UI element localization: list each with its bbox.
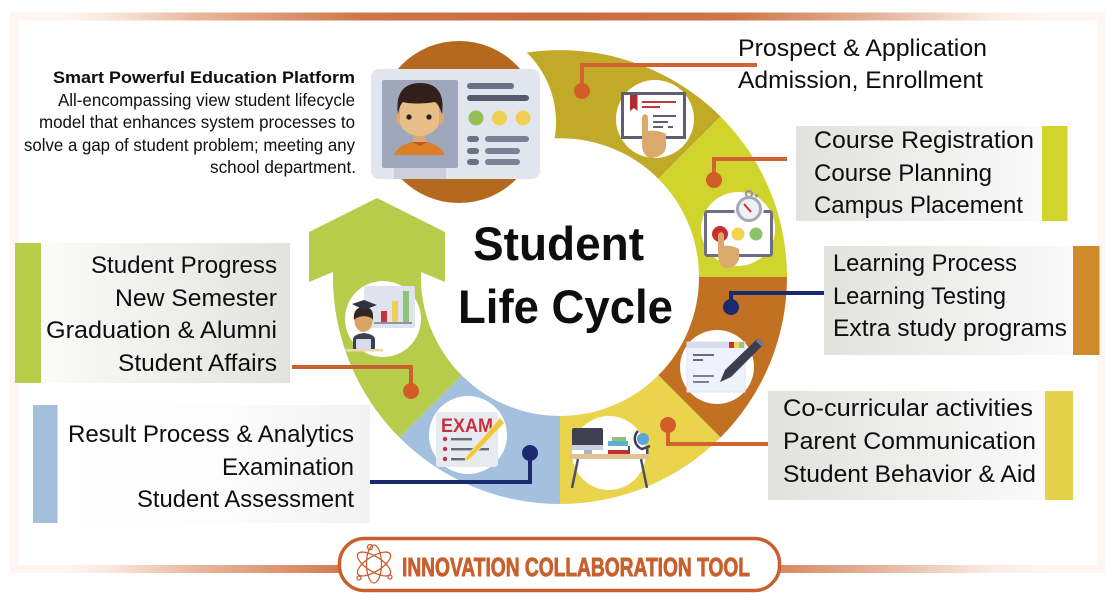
panel: course — [796, 126, 1068, 221]
panel: learning — [824, 246, 1100, 355]
segment: result — [400, 375, 560, 504]
panel: result process: Student Assessment — [137, 486, 354, 513]
life cycle ring — [309, 50, 787, 504]
panel: result process: Result Process & Analytics — [68, 421, 354, 448]
panel: course: Campus Placement — [814, 192, 1023, 219]
panel: co-curricular: Parent Communication — [783, 428, 1036, 455]
connector: co-curricular — [660, 417, 768, 444]
intro text block: solve a gap of student problem; meeting any — [24, 135, 355, 155]
icon: exam sheet — [429, 396, 507, 474]
intro text block: All-encompassing view student lifecycle — [58, 90, 355, 110]
panel: co-curricular — [768, 391, 1073, 500]
panel: result process — [33, 405, 370, 523]
panel: learning: Learning Process — [833, 250, 1017, 277]
title: Life Cycle — [458, 280, 673, 333]
title: Student — [473, 217, 644, 270]
text: prospect and admission — [738, 35, 987, 94]
segment: co-curricular — [560, 375, 720, 504]
connector: learning — [723, 293, 824, 315]
banner: innovation collaboration tool — [340, 538, 780, 590]
panel: learning: Extra study programs — [833, 315, 1067, 342]
segment: arrow progress — [309, 198, 462, 438]
connector: course — [706, 159, 787, 188]
segment: prospect — [501, 50, 720, 179]
connector: progress — [292, 367, 419, 399]
intro text block: Smart Powerful Education Platform — [53, 69, 355, 87]
icon: prospect tablet — [616, 80, 694, 158]
panel: co-curricular: Co-curricular activities — [783, 395, 1033, 422]
panel: course: Course Registration — [814, 127, 1034, 154]
title — [458, 217, 673, 333]
icon: atom — [354, 544, 394, 583]
panel: student progress — [15, 243, 290, 383]
student ID card icon — [362, 25, 556, 219]
icon: course tablet and stopwatch — [701, 191, 775, 268]
connector: result — [370, 445, 538, 482]
intro text block: school department. — [210, 157, 356, 177]
panel: student progress: New Semester — [115, 285, 277, 312]
text: prospect and admission: Prospect & Application — [738, 35, 987, 62]
panel: co-curricular: Student Behavior & Aid — [783, 461, 1036, 488]
intro text block — [24, 69, 356, 177]
icon: graduate with bar chart — [345, 281, 421, 357]
connector: prospect — [574, 65, 757, 99]
text: prospect and admission: Admission, Enrollment — [738, 67, 983, 94]
panel: student progress: Student Affairs — [118, 350, 277, 377]
segment: learning — [658, 277, 787, 438]
segment: course — [658, 116, 787, 277]
panel: student progress: Student Progress — [91, 252, 277, 279]
panel: course: Course Planning — [814, 160, 992, 187]
icon: learning window and pen — [680, 330, 764, 404]
icon: desk with computer and globe — [569, 416, 650, 490]
panel: result process: Examination — [222, 454, 354, 481]
icon: exam sheet: EXAM — [441, 416, 493, 437]
intro text block: model that enhances system processes to — [39, 112, 355, 132]
banner: innovation collaboration tool: INNOVATION COLLABORATION TOOL — [402, 552, 750, 582]
panel: learning: Learning Testing — [833, 283, 1006, 310]
panel: student progress: Graduation & Alumni — [46, 317, 277, 344]
